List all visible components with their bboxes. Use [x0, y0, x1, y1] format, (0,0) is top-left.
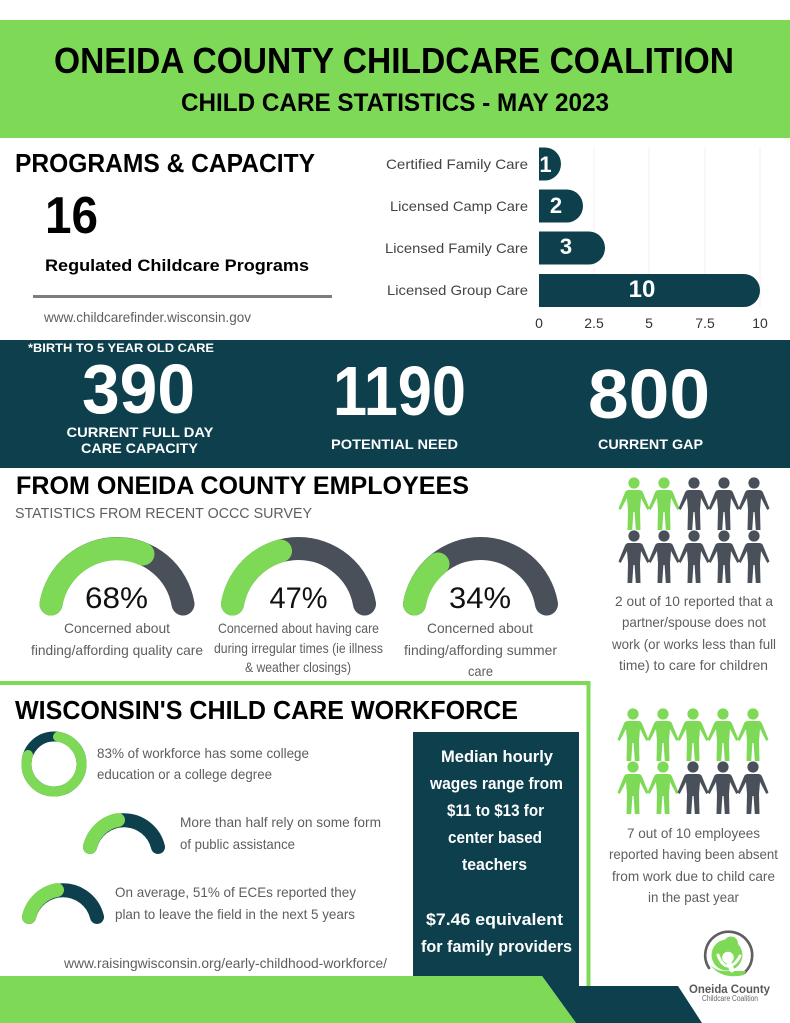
callout: median wages: $7.46 equivalent [426, 910, 563, 929]
text: college education: education or a college degree [97, 766, 272, 782]
chart axis labels: 5 [645, 315, 653, 331]
title: ONEIDA COUNTY CHILDCARE COALITION [54, 40, 734, 81]
logo: Oneida County Childcare Coalition: Childcare Coalition [702, 994, 758, 1003]
stat: 1190 potential need: 1190 [333, 352, 466, 430]
pictogram: 7 out of 10 absent stat: from work due to child care [612, 868, 775, 884]
bar: licensed family care [385, 232, 605, 264]
pictogram: 2 out of 10 partner stat: partner/spouse does not [622, 614, 766, 630]
text: public assistance [180, 814, 381, 852]
bar chart: program types [385, 147, 768, 331]
text: leaving the field: On average, 51% of ECEs reported they [115, 884, 356, 900]
gauge: 47 percent [214, 549, 383, 675]
callout: median wages: wages range from [429, 774, 563, 793]
chart axis labels: 10 [752, 315, 768, 331]
gauge: leaving the field [29, 890, 97, 917]
bar: certified family care: 1 [539, 152, 552, 177]
callout: median wages: Median hourly [441, 747, 554, 766]
text: public assistance: of public assistance [180, 836, 295, 852]
panel: programs and capacity [15, 148, 332, 325]
heading: workforce: WISCONSIN'S CHILD CARE WORKFORCE [15, 695, 518, 725]
callout: median wages: center based [448, 828, 542, 847]
bar: licensed family care: 3 [560, 234, 572, 259]
stat: 16 programs: 16 [45, 187, 98, 245]
text: leaving the field: plan to leave the field in the next 5 years [115, 906, 355, 922]
heading: programs and capacity: PROGRAMS & CAPACITY [15, 148, 315, 178]
stat: 390 capacity: CARE CAPACITY [81, 440, 199, 456]
chart axis labels: 0 [535, 315, 543, 331]
callout: median wages [421, 747, 572, 956]
gauge: 34 percent: Concerned about [427, 620, 533, 636]
bar: licensed group care: 10 [629, 276, 655, 303]
gauge: 34 percent [404, 549, 557, 679]
gauge: 34 percent: 34% [449, 582, 511, 615]
stat: 390 capacity: CURRENT FULL DAY [66, 424, 214, 440]
subheading: survey: STATISTICS FROM RECENT OCCC SURVEY [15, 505, 312, 522]
gauge: public assistance [90, 820, 158, 847]
bar: licensed camp care: Licensed Camp Care [390, 198, 528, 214]
header banner [0, 20, 790, 138]
subtitle: CHILD CARE STATISTICS - MAY 2023 [181, 89, 609, 117]
stat: 390 capacity [66, 350, 214, 456]
stat: 390 capacity: 390 [82, 350, 195, 428]
donut: 83 percent [26, 736, 82, 792]
chart axis labels: 7.5 [695, 315, 715, 331]
gauge: 68 percent: 68% [85, 582, 148, 615]
text: college education [97, 745, 309, 782]
bar: licensed camp care [390, 190, 583, 222]
pictogram: 2 out of 10 partner stat: work (or works less than full [611, 636, 776, 652]
gauge: 68 percent [31, 549, 203, 658]
bar: licensed group care: Licensed Group Care [387, 282, 528, 298]
link: child care finder: www.childcarefinder.wisconsin.gov [43, 309, 251, 325]
pictogram: 2 out of 10 partner stat: time) to care for children [619, 657, 768, 673]
pictogram: 2 out of 10 partner stat [611, 477, 776, 673]
callout: median wages: teachers [462, 855, 527, 874]
pictogram: 2 out of 10 partner stat: 2 out of 10 reported that a [615, 593, 773, 609]
pictogram: 7 out of 10 absent stat: reported having been absent [609, 846, 778, 862]
stat: 800 current gap: CURRENT GAP [598, 436, 703, 452]
logo: Oneida County Childcare Coalition [689, 932, 770, 1003]
heading: employees: FROM ONEIDA COUNTY EMPLOYEES [16, 472, 469, 500]
note: birth to 5: *BIRTH TO 5 YEAR OLD CARE [28, 341, 214, 355]
stat: 1190 potential need: POTENTIAL NEED [331, 436, 458, 452]
stat: 800 current gap: 800 [588, 355, 710, 433]
gauge: 47 percent: Concerned about having care [218, 620, 379, 636]
text: public assistance: More than half rely on some form [180, 814, 381, 830]
pictogram: 7 out of 10 absent stat [609, 708, 778, 905]
panel: from Oneida County employees [15, 472, 557, 679]
chart axis labels: 2.5 [584, 315, 604, 331]
bar: licensed family care: Licensed Family Care [385, 240, 528, 256]
gauge: 47 percent: during irregular times (ie illness [214, 640, 383, 656]
label: regulated childcare programs: Regulated Childcare Programs [45, 256, 309, 275]
callout: median wages: for family providers [421, 937, 572, 956]
logo: Oneida County Childcare Coalition: Oneida County [689, 982, 770, 996]
panel: Wisconsin child care workforce [0, 683, 588, 986]
bar: certified family care: Certified Family Care [386, 156, 528, 172]
gauge: 47 percent: 47% [270, 582, 328, 615]
gauge: 34 percent: care [468, 663, 493, 679]
text: college education: 83% of workforce has some college [97, 745, 309, 761]
gauge: 68 percent: Concerned about [64, 620, 170, 636]
link: raising wisconsin: www.raisingwisconsin.org/early-childhood-workforce/ [63, 955, 387, 971]
stat: 1190 potential need [331, 352, 466, 452]
callout: median wages: $11 to $13 for [447, 801, 544, 820]
gauge: 47 percent: & weather closings) [245, 659, 351, 675]
bar: licensed camp care: 2 [550, 193, 562, 218]
gauge: 34 percent: finding/affording summer [404, 642, 557, 658]
footer band [0, 732, 702, 1023]
pictogram: 7 out of 10 absent stat: 7 out of 10 employees [627, 825, 760, 841]
bar: licensed group care [387, 274, 760, 307]
bar: certified family care [386, 148, 561, 180]
panel: capacity stats band [0, 340, 790, 468]
pictogram: 7 out of 10 absent stat: in the past year [648, 889, 739, 905]
text: leaving the field [115, 884, 356, 922]
gauge: 68 percent: finding/affording quality care [31, 642, 203, 658]
chart axis labels [535, 315, 768, 331]
